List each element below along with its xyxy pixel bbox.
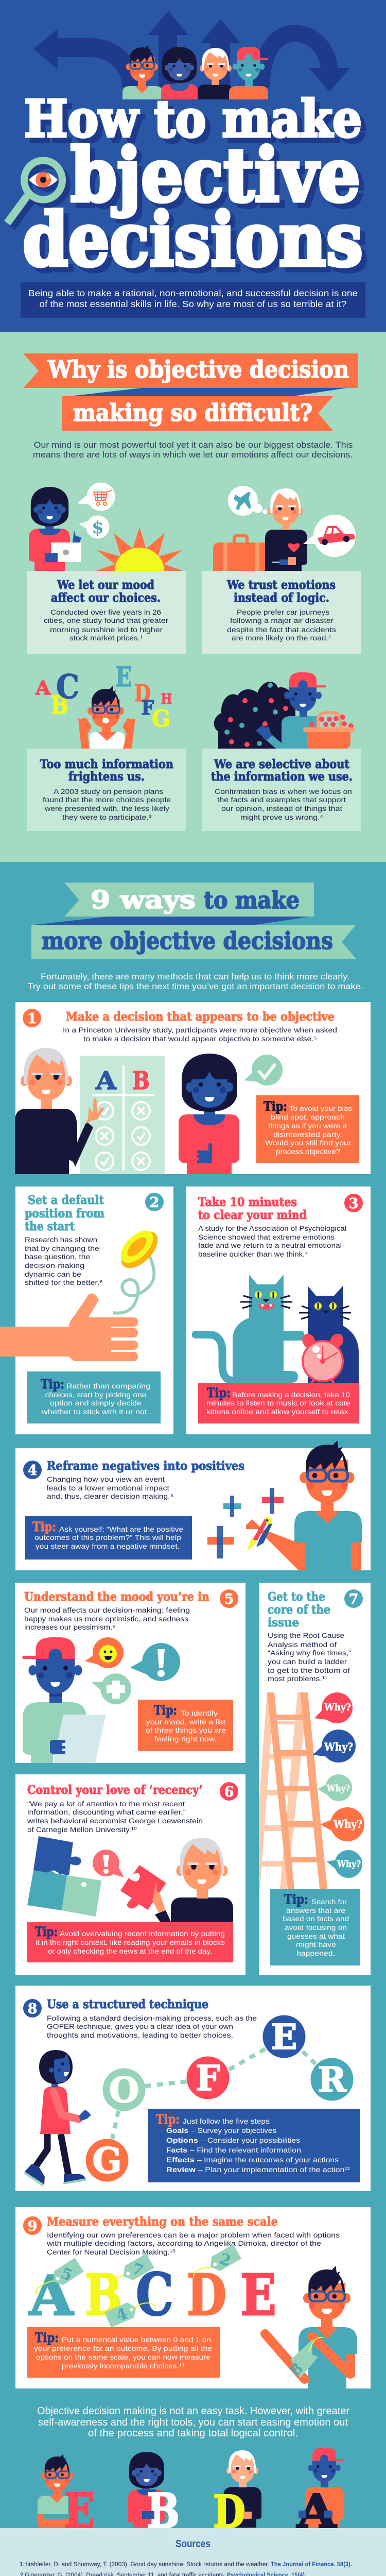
panel: too much information: Too much information	[40, 757, 173, 771]
tip box 5	[138, 1700, 233, 1751]
decision arrows behind people	[33, 11, 350, 92]
tip box 7: might have	[296, 1941, 336, 1948]
tip box 6: Tip:	[35, 1924, 58, 1939]
header background	[0, 0, 386, 332]
panel: tip 7	[259, 1583, 371, 1975]
why bubbles: Why?	[324, 1740, 353, 1753]
body 5: happy makes us more optimistic, and sadness	[24, 1615, 188, 1623]
body 7	[268, 1632, 351, 1683]
illustration: walking woman	[24, 2050, 91, 2187]
why bubbles: Why?	[326, 1783, 350, 1794]
ribbon heading: why: making so difficult?	[73, 399, 312, 427]
panel: mood: We let our mood	[57, 578, 154, 592]
tip box 7: based on facts and	[283, 1915, 349, 1923]
tip box 4: Ask yourself: “What are the positive	[59, 1526, 183, 1533]
illustration: letters with price tags	[29, 2244, 276, 2329]
number 5: 5	[224, 1591, 234, 1607]
illustration: boy pointing with tag: 8	[287, 2360, 307, 2380]
illustration: letters with price tags: D	[187, 2262, 226, 2328]
why bubbles	[313, 1692, 364, 1878]
tip box 7: avoid focusing on	[285, 1924, 347, 1931]
illustration: plus signs	[207, 1488, 284, 1558]
illustration: four people holding letters: A	[296, 2484, 337, 2539]
panel: too much information: found that the more choices people	[43, 796, 171, 804]
tip box 6: Avoid overvaluing recent information by putting	[60, 1930, 225, 1938]
illustration: coin flip hand	[0, 1225, 164, 1361]
number 1	[23, 1009, 41, 1027]
number 3	[344, 1194, 363, 1212]
tip box 1: disinterested party.	[273, 1131, 342, 1139]
ribbon heading: 9 ways: to make	[204, 886, 300, 914]
heading 9: Measure everything on the same scale	[47, 2215, 278, 2229]
tip box 8: – Survey your objectives	[191, 2127, 276, 2134]
heading 3	[198, 1195, 307, 1222]
number 3: 3	[349, 1196, 358, 1212]
text: fortunately	[28, 972, 363, 991]
GOFER path diagram: G	[92, 2140, 122, 2181]
body 7: Using the Root Cause	[268, 1632, 344, 1639]
tip box 8: – Consider your possibilities	[201, 2137, 300, 2144]
mint section background	[0, 332, 386, 862]
panel: too much information: frightens us.	[68, 770, 145, 784]
title	[23, 90, 363, 283]
body 4: Changing how you view an event	[47, 1476, 165, 1483]
four people group	[122, 45, 268, 99]
illustration: board A B with checks	[80, 1056, 165, 1174]
illustration: letters with price tags: 4	[114, 2304, 130, 2325]
panel: emotions: are more likely on the road.²	[232, 634, 331, 642]
number 8: 8	[28, 2001, 37, 2017]
tip box 5: Tip:	[154, 1703, 177, 1718]
GOFER path diagram: O	[109, 2070, 139, 2110]
panel: emotions	[202, 571, 361, 654]
heading 8: Use a structured technique	[47, 1997, 208, 2011]
panel: selective information: the information we use.	[211, 770, 353, 784]
body 1: In a Princeton University study, participants were more objective when asked	[63, 1026, 337, 1034]
tip box 2: option and simply decide	[50, 1399, 142, 1407]
number 9	[23, 2216, 42, 2235]
number 8	[23, 1999, 42, 2018]
tip box 7: guesses at what	[287, 1933, 345, 1940]
heading 7: Get to the	[268, 1590, 325, 1604]
tip box 6	[27, 1922, 233, 1962]
tip box 9: Tip:	[35, 2330, 59, 2345]
body 9: Center for Neural Decision Making.¹⁰	[47, 2248, 176, 2256]
illustration: letters with price tags: B	[85, 2262, 122, 2328]
panel: tip 2	[0, 1187, 173, 1434]
panel: selective information: the facts and examples that support	[217, 796, 346, 804]
body 8: thoughts and motivations, leading to better choices.	[47, 2031, 233, 2039]
body 4: leads to a lower emotional impact	[47, 1484, 169, 1492]
illustration: scared man with letters: C	[56, 668, 79, 706]
panel: selective information: Confirmation bias is when we focus on	[215, 788, 352, 795]
ribbon heading: 9 ways	[31, 883, 356, 959]
tip box 3: kittens online and allow yourself to relax.	[206, 1408, 350, 1416]
body 5: Our mood affects our decision-making: feeling	[24, 1606, 190, 1614]
tip box 9: Put a numerical value between 0 and 1 on	[62, 2336, 211, 2344]
text: fortunately: Fortunately, there are many methods that can help us to think more clearly.	[41, 972, 349, 981]
number 2	[145, 1193, 164, 1211]
body 9	[46, 2231, 340, 2256]
panel: selective information: might prove us wrong.⁴	[240, 814, 323, 821]
body 9: with multiple deciding factors, according to Angelika Dimoka, director of the	[46, 2240, 321, 2247]
body 3	[198, 1225, 346, 1258]
closing statement: of the process and taking total logical control.	[88, 2428, 298, 2439]
body 2	[25, 1236, 103, 1286]
illustration: woman thumbs up	[179, 1054, 283, 1174]
body 4	[47, 1476, 173, 1500]
illustration: two cats and clock	[196, 1275, 359, 1383]
panel: emotions: People prefer car journeys	[237, 608, 329, 616]
closing statement	[37, 2405, 349, 2439]
illustration: letters with price tags: 2	[217, 2250, 233, 2270]
panel: tip 1	[15, 1002, 371, 1174]
body 7: “Asking why five times,”	[268, 1649, 351, 1657]
tip box 1	[256, 1095, 359, 1163]
body 2: that by changing the	[25, 1245, 99, 1252]
number 4	[23, 1461, 42, 1479]
ribbon heading: 9 ways: 9 ways	[91, 886, 196, 914]
body 3: Science showed that extreme emotions	[198, 1233, 335, 1241]
tip box 8: – Find the relevant information	[190, 2146, 301, 2154]
tip box 3: Before making a decision, take 10	[232, 1391, 350, 1399]
tip box 1: To avoid your bias	[289, 1105, 352, 1112]
illustration: boy pointing with tag	[265, 2266, 357, 2388]
illustration: man with suitcase, plane and car	[213, 486, 356, 571]
body 6	[27, 1800, 203, 1834]
tip box 8: Tip:	[156, 2112, 180, 2127]
body 3: fade and we return to a neutral emotional	[198, 1242, 342, 1249]
tip box 3: Tip:	[207, 1385, 231, 1400]
illustration: letters with price tags: A	[29, 2263, 74, 2328]
panel: emotions: instead of logic.	[234, 591, 329, 605]
illustration: four people holding letters: D	[213, 2485, 245, 2538]
source list: 1	[20, 2562, 23, 2568]
tip box 1: process objective?	[276, 1148, 340, 1156]
body 2: decision-making	[25, 1262, 84, 1269]
illustration: letters with price tags: E	[240, 2262, 276, 2328]
number 7	[344, 1589, 363, 1608]
GOFER path diagram: E	[271, 2016, 297, 2057]
tip box 8: Just follow the five steps	[183, 2117, 270, 2125]
icon: magnifier with eye	[7, 161, 62, 223]
panel: too much information	[27, 749, 186, 831]
number 5	[220, 1589, 238, 1608]
body 6: “We pay a lot of attention to the most recent	[27, 1800, 185, 1808]
tip box 9	[27, 2327, 220, 2378]
illustration: woman with laptop and sun: $	[92, 517, 104, 538]
text: fortunately: Try out some of these tips the next time you’ve got an important decision to make.	[28, 982, 363, 991]
illustration: letters with price tags: C	[136, 2261, 173, 2329]
heading 3: to clear your mind	[198, 1208, 307, 1222]
ribbon heading: why	[23, 353, 358, 431]
tip box 5: To identify	[181, 1709, 218, 1717]
body 3: A study for the Association of Psychological	[198, 1225, 346, 1232]
illustration: man picking berries	[214, 672, 355, 749]
tip box 1: Would you still find your	[265, 1139, 352, 1147]
panel: selective information	[202, 749, 361, 831]
GOFER path diagram	[85, 2015, 353, 2181]
title: How to make	[24, 90, 362, 149]
why bubbles: Why?	[324, 1702, 351, 1713]
source list: Hirshleifer, D. and Shumway, T. (2003). Good day sunshine: Stock returns and the weather.	[23, 2562, 269, 2568]
body 3: baseline quicker than we think.⁷	[198, 1250, 308, 1258]
heading 3: Take 10 minutes	[198, 1195, 297, 1209]
body 2: Research has shown	[25, 1236, 97, 1244]
body 9: Identifying our own preferences can be a major problem when faced with options	[47, 2231, 340, 2239]
body 7: most problems.¹¹	[268, 1675, 328, 1683]
illustration: scared man with letters: B	[51, 691, 68, 720]
tip box 3	[198, 1383, 359, 1423]
sources heading: Sources	[176, 2538, 210, 2550]
number 9: 9	[28, 2218, 37, 2234]
ribbon heading: why: Why is objective decision	[47, 355, 349, 383]
why bubbles: Why?	[337, 1859, 361, 1870]
illustration: woman with laptop and sun	[29, 482, 183, 571]
heading 2: position from	[25, 1207, 104, 1221]
number 1: 1	[27, 1011, 37, 1027]
illustration: puzzle pieces	[27, 1836, 166, 1917]
panel: mood: morning sunshine led to higher	[50, 626, 163, 634]
body 8	[47, 2014, 257, 2039]
illustration: old man with puzzle piece	[152, 1838, 233, 1922]
number 6: 6	[224, 1784, 234, 1800]
illustration: board A B with checks: B	[132, 1066, 150, 1095]
tip box 2: Tip:	[41, 1377, 64, 1392]
source list: The Journal of Finance. 58(3).	[271, 2562, 352, 2568]
heading 2: Set a default	[28, 1193, 104, 1207]
tip box 8: Facts	[166, 2146, 187, 2154]
illustration: four people holding letters: E	[64, 2483, 95, 2539]
panel: tip 4	[15, 1440, 371, 1570]
panel: tip 3	[186, 1187, 371, 1434]
illustration: boy with pencil	[246, 1440, 362, 1570]
illustration: four people holding letters	[38, 2448, 344, 2539]
tip box 9: your preference for an outcome. By putting all the	[34, 2345, 212, 2352]
illustration: scared man with letters: A	[35, 677, 51, 699]
number 2: 2	[150, 1195, 159, 1211]
tip box 7: happened.	[296, 1950, 335, 1957]
tip box 4: outcomes of this problem?” This will help	[34, 1534, 181, 1541]
panel: too much information: A 2003 study on pension plans	[54, 788, 163, 795]
illustration: scared man with letters: G	[152, 706, 170, 732]
text: mind paragraph: means there are lots of ways in which we let our emotions affect our decisions.	[33, 450, 353, 460]
tip box 7: Search for	[311, 1898, 347, 1906]
closing statement: self-awareness and the right tools, you can start easing emotion out	[38, 2417, 348, 2428]
body 2: dynamic can be	[25, 1270, 81, 1278]
panel: emotions: We trust emotions	[226, 578, 336, 592]
sources panel	[0, 2528, 386, 2576]
heading 5: Understand the mood you’re in	[24, 1590, 209, 1604]
heading 6: Control your love of ‘recency’	[27, 1783, 203, 1797]
tip box 4: you steer away from a negative mindset.	[36, 1543, 180, 1550]
tip box 5: of three things you are	[146, 1726, 226, 1734]
tip box 5: your mood, write a list	[146, 1718, 225, 1726]
body 6: of Carnegie Mellon University.¹⁰	[27, 1826, 137, 1834]
body 2: base question, the	[25, 1253, 90, 1261]
tip box 1: things as if you were a	[268, 1122, 347, 1130]
GOFER path diagram: F	[196, 2058, 220, 2098]
tip box 3: minutes to listen to music or look at cute	[206, 1399, 350, 1407]
tip box 5: feeling right now.	[154, 1735, 217, 1743]
heading 7: core of the	[268, 1603, 330, 1617]
tip box 8: Effects	[166, 2156, 195, 2164]
heading 2: the start	[25, 1219, 75, 1233]
illustration: boy with list and mood bubbles	[23, 1637, 180, 1763]
tip box 7: answers that are	[286, 1907, 345, 1914]
illustration: scared man with letters	[35, 662, 172, 749]
tip box 6: it in the right context, like reading your emails in blocks	[36, 1939, 225, 1946]
panel: tip 8	[15, 1986, 371, 2191]
illustration: letters with price tags: 7	[129, 2260, 146, 2280]
number 6	[220, 1782, 238, 1801]
tip box 2: choices, start by picking one	[45, 1391, 146, 1399]
panel: selective information: We are selective about	[214, 757, 349, 771]
tip box 8	[148, 2109, 360, 2182]
heading 7	[268, 1590, 330, 1630]
illustration: scared man with letters: H	[161, 691, 172, 707]
panel: emotions: following a major air disaster	[230, 617, 334, 624]
tip box 8: – Plan your implementation of the action¹²	[198, 2166, 350, 2174]
tip box 8: – Imagine the outcomes of your actions	[197, 2156, 339, 2164]
heading 2	[25, 1193, 104, 1233]
body 1	[63, 1026, 337, 1043]
intro box: of the most essential skills in life. So why are most of us so terrible at it?	[39, 299, 347, 309]
tip box 9: previously incomparable choices.¹³	[62, 2362, 185, 2370]
panel: tip 6	[15, 1774, 245, 1975]
panel: selective information: our opinion, instead of things that	[221, 805, 342, 812]
tip box 1: Tip:	[264, 1099, 287, 1114]
panel: tip 5	[15, 1583, 245, 1763]
tip box 2: whether to stick with it or not.	[41, 1408, 149, 1416]
illustration: scared man with letters: E	[115, 662, 132, 693]
tip box 9: options on the same scale, you can now measure	[36, 2353, 210, 2361]
closing statement: Objective decision making is not an easy task. However, with greater	[37, 2405, 349, 2417]
heading 7: issue	[268, 1616, 299, 1630]
body 8: Following a standard decision-making process, such as the	[47, 2014, 257, 2022]
heading 1: Make a decision that appears to be objective	[66, 1010, 335, 1024]
panel: mood: cities, one study found that greater	[44, 617, 169, 624]
tip box 2: Rather than comparing	[66, 1382, 150, 1390]
GOFER path diagram: R	[318, 2059, 347, 2100]
illustration: old man pointing	[15, 1048, 104, 1174]
teal section background	[0, 862, 386, 2528]
body 7: you can build a ladder	[268, 1658, 347, 1666]
panel: too much information: they were to participate.³	[62, 814, 152, 821]
text: mind paragraph	[33, 440, 353, 460]
illustration: ladders	[259, 1692, 327, 1889]
body 1: to make a decision that would appear objective to someone else.⁵	[83, 1035, 317, 1043]
heading 4: Reframe negatives into positives	[47, 1459, 244, 1473]
panel: mood: affect our choices.	[51, 591, 161, 605]
tip box 8: Review	[166, 2166, 196, 2174]
illustration: board A B with checks: A	[95, 1066, 117, 1095]
body 7: Analysis method of	[268, 1641, 337, 1649]
body 6: writes behavioral economist George Loewenstein	[27, 1817, 203, 1825]
body 5: increases our pessimism.⁹	[24, 1623, 116, 1631]
tip box 8: Options	[166, 2137, 198, 2144]
tip box 8: Goals	[166, 2127, 188, 2134]
illustration: letters with price tags: 5	[58, 2264, 75, 2285]
body 7: to get to the bottom of	[268, 1667, 350, 1674]
illustration: scared man with letters: F	[142, 696, 154, 719]
tip box 1: blind spot, approach	[271, 1113, 345, 1121]
body 8: GOFER technique, gives you a clear idea of your own	[47, 2023, 233, 2030]
intro box	[21, 282, 365, 318]
number 7: 7	[349, 1591, 358, 1607]
intro box: Being able to make a rational, non-emotional, and successful decision is one	[28, 288, 358, 298]
title: bjective	[71, 132, 360, 218]
tip box 6: or only checking the news at the end of the day.	[48, 1947, 212, 1955]
why bubbles: Why?	[333, 1818, 362, 1831]
tip box 7	[270, 1889, 360, 1965]
body 2: shifted for the better.⁶	[25, 1279, 103, 1286]
panel: emotions: despite the fact that accidents	[227, 626, 336, 634]
panel: mood: stock market prices.¹	[69, 634, 143, 642]
ribbon heading: 9 ways: more objective decisions	[42, 927, 333, 955]
panel: too much information: were presented with, the less likely	[44, 805, 169, 812]
panel: mood: Conducted over five years in 26	[50, 608, 161, 616]
panel: mood	[27, 571, 186, 654]
illustration: scared man with letters: D	[134, 680, 151, 707]
tip box 4: Tip:	[32, 1519, 56, 1534]
tip box 4	[25, 1516, 192, 1560]
illustration: four people holding letters: B	[147, 2483, 180, 2539]
tip box 2	[27, 1371, 161, 1423]
text: mind paragraph: Our mind is our most powerful tool yet it can also be our biggest obstacle. This	[34, 440, 353, 450]
body 6: information, discounting what came earlier,”	[27, 1808, 186, 1816]
panel: tip 9	[15, 2207, 371, 2388]
number 4: 4	[28, 1463, 37, 1479]
tip box 7: Tip:	[284, 1892, 308, 1907]
source list	[20, 2562, 352, 2576]
body 5	[24, 1606, 190, 1631]
body 4: and, thus, clearer decision making.⁸	[47, 1493, 173, 1500]
